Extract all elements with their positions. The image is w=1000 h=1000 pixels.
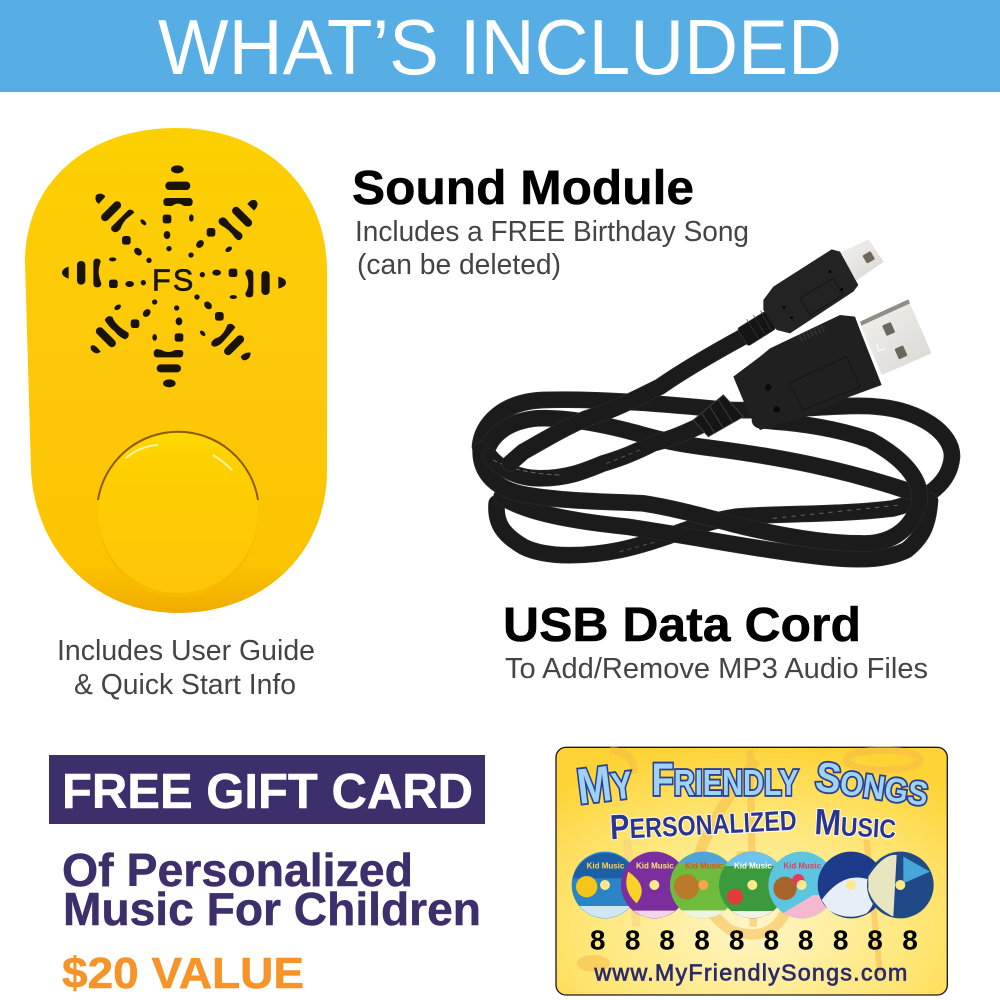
card subtitle: MUSIC: [814, 801, 897, 846]
gift card description: [62, 844, 481, 935]
printed strand: [490, 417, 720, 478]
title: WHAT’S INCLUDED: [158, 3, 842, 91]
lower strand: [502, 497, 930, 559]
lower-right spoke: [194, 294, 251, 360]
access code digits: 8: [659, 924, 675, 955]
mini USB strain relief: [737, 311, 776, 346]
mini USB plug: [737, 240, 883, 346]
sound module device: [25, 128, 327, 613]
CD row: Kid Music: [734, 861, 772, 870]
upper-left spoke: [95, 194, 152, 263]
CD row: Kid Music: [685, 861, 723, 870]
access code digits: 8: [867, 924, 883, 955]
card URL: www.MyFriendlySongs.com: [593, 960, 907, 986]
top spoke: [163, 165, 194, 251]
gift card banner: FREE GIFT CARD: [62, 765, 473, 819]
FS logo: FS: [152, 263, 193, 297]
access code digits: [590, 924, 918, 955]
USB data cord: [480, 240, 952, 559]
access code digits: 8: [833, 924, 848, 955]
access code digits: 8: [764, 924, 779, 955]
gift card description: Music For Children: [63, 883, 481, 935]
push button: [98, 432, 258, 597]
card title: SONGS: [813, 752, 932, 815]
cable coils: [480, 337, 952, 559]
sound module description: [355, 216, 749, 281]
inner crossing strand: [485, 418, 920, 495]
user guide note: & Quick Start Info: [74, 669, 296, 701]
USB-A plug: [693, 299, 932, 437]
USB cord heading: USB Data Cord: [503, 599, 861, 652]
CD row: [572, 852, 934, 918]
CD row: Kid Music: [783, 861, 822, 870]
access code digits: 8: [902, 924, 918, 955]
sound module description: (can be deleted): [357, 249, 561, 281]
access code digits: 8: [729, 924, 744, 955]
sound module description: Includes a FREE Birthday Song: [355, 216, 749, 248]
middle strand: [481, 420, 920, 543]
CD row: Kid Music: [636, 861, 674, 870]
value: $20 VALUE: [62, 949, 304, 998]
gift card description: Of Personalized: [62, 844, 413, 896]
gift card image: [556, 747, 947, 995]
access code digits: 8: [694, 924, 710, 955]
USB-A strain relief: [693, 395, 743, 437]
card title: FRIENDLY: [652, 754, 798, 805]
left spoke: [62, 257, 146, 288]
USB cord description: To Add/Remove MP3 Audio Files: [505, 653, 928, 685]
mini USB strand: [510, 337, 743, 463]
right spoke: [200, 269, 286, 299]
outer strand: [480, 400, 952, 555]
CD row: Kid Music: [587, 861, 625, 870]
access code digits: 8: [590, 924, 605, 955]
card title: [574, 752, 932, 815]
speaker grille: [62, 165, 286, 387]
lower-left spoke: [91, 299, 157, 353]
card subtitle: PERSONALIZED: [609, 799, 797, 847]
access code digits: 8: [798, 924, 813, 955]
header band: [0, 0, 1000, 92]
card title: MY: [574, 753, 635, 815]
user guide note: [57, 635, 315, 701]
music note background: [577, 750, 920, 973]
access code digits: 8: [625, 924, 640, 955]
upper-right spoke: [188, 200, 258, 258]
sound module heading: Sound Module: [352, 162, 694, 215]
user guide note: Includes User Guide: [57, 635, 315, 667]
device body: [25, 128, 327, 613]
bottom spoke: [152, 305, 183, 387]
